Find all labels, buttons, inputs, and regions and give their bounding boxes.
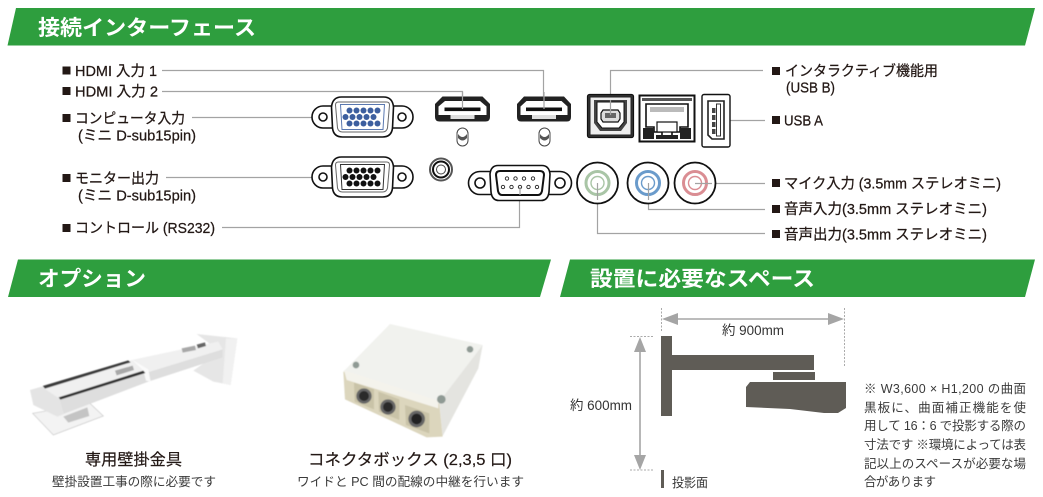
icon: small screw under HDMI 2 — [457, 128, 468, 146]
heading banner: options: オプション — [38, 268, 146, 291]
label: mic input: マイク入力 (3.5mm ステレオミニ) — [784, 176, 1001, 192]
icon: small screw under HDMI 1 — [539, 128, 550, 146]
label: audio input: 音声入力(3.5mm ステレオミニ) — [784, 200, 987, 218]
note text: 用して 16：6 で投影する際の — [864, 418, 1026, 433]
width label: 約 900mm — [722, 323, 784, 338]
icon: red mic jack — [674, 162, 716, 204]
label: computer input: (ミニ D-sub15pin) — [78, 128, 196, 144]
mount plate — [773, 372, 815, 380]
note text — [864, 382, 1026, 489]
icon: green audio output jack — [577, 162, 618, 204]
icon: VGA computer input port — [312, 97, 413, 137]
left connector labels — [62, 63, 215, 237]
note text: 合があります — [864, 474, 936, 489]
caption: connector box: コネクタボックス (2,3,5 口) — [308, 451, 512, 469]
label: interactive function USB B — [772, 62, 938, 96]
note text: ※ W3,600 × H1,200 の曲面 — [864, 382, 1026, 396]
label: control RS232: コントロール (RS232) — [75, 221, 215, 237]
caption: connector box: ワイドと PC 間の配線の中継を行います — [297, 474, 524, 489]
wall mount silhouette — [661, 336, 814, 416]
label: interactive function USB B: (USB B) — [786, 80, 835, 96]
note text: 寸法です ※環境によっては表 — [864, 438, 1026, 452]
label: computer input — [62, 110, 196, 144]
heading banner: required installation space — [560, 260, 1035, 297]
heading banner: options — [8, 260, 551, 297]
heading banner: required installation space: 設置に必要なスペース — [590, 268, 815, 291]
icon: USB B port — [588, 94, 634, 138]
icon: HDMI port 2 — [435, 92, 490, 122]
connector leader lines — [162, 70, 765, 234]
label: HDMI input 2: HDMI 入力 2 — [75, 84, 158, 100]
caption: connector box — [297, 451, 524, 489]
width dimension arrow — [662, 308, 844, 367]
label: interactive function USB B: インタラクティブ機能用 — [785, 62, 938, 80]
height label: 約 600mm — [570, 398, 632, 413]
caption: wall mount bracket: 専用壁掛金具 — [85, 451, 182, 469]
heading banner: connection interface — [8, 8, 1035, 46]
height dimension arrow — [630, 336, 653, 470]
projection surface marker: 投影面 — [672, 475, 708, 490]
photo: wall mount bracket — [30, 334, 237, 435]
photo: connector box — [343, 324, 483, 437]
projector silhouette — [746, 382, 846, 413]
icon: USB A port — [702, 94, 730, 147]
label: monitor output: モニター出力 — [75, 170, 159, 188]
caption: wall mount bracket — [52, 451, 216, 489]
label: monitor output: (ミニ D-sub15pin) — [78, 188, 196, 204]
icon: small round jack — [430, 158, 452, 180]
label: computer input: コンピュータ入力 — [75, 110, 185, 128]
icon: VGA monitor output port — [312, 157, 413, 197]
right connector labels — [772, 62, 1001, 244]
label: HDMI input 1: HDMI 入力 1 — [75, 63, 157, 80]
label: monitor output — [62, 170, 196, 204]
projection surface marker — [661, 470, 708, 490]
note text: 黒板に、曲面補正機能を使 — [864, 400, 1026, 415]
icon: RS232 serial port — [468, 166, 572, 200]
heading banner: connection interface: 接続インターフェース — [38, 17, 256, 40]
icon: HDMI port 1 — [517, 92, 571, 122]
label: audio output: 音声出力(3.5mm ステレオミニ) — [784, 226, 987, 244]
diagram: installation space — [570, 308, 846, 490]
label: USB A: USB A — [784, 114, 823, 130]
caption: wall mount bracket: 壁掛設置工事の際に必要です — [52, 474, 216, 489]
note text: 記以上のスペースが必要な場 — [864, 456, 1026, 471]
icon: LAN port — [640, 96, 694, 142]
icon: blue audio input jack — [628, 162, 668, 204]
